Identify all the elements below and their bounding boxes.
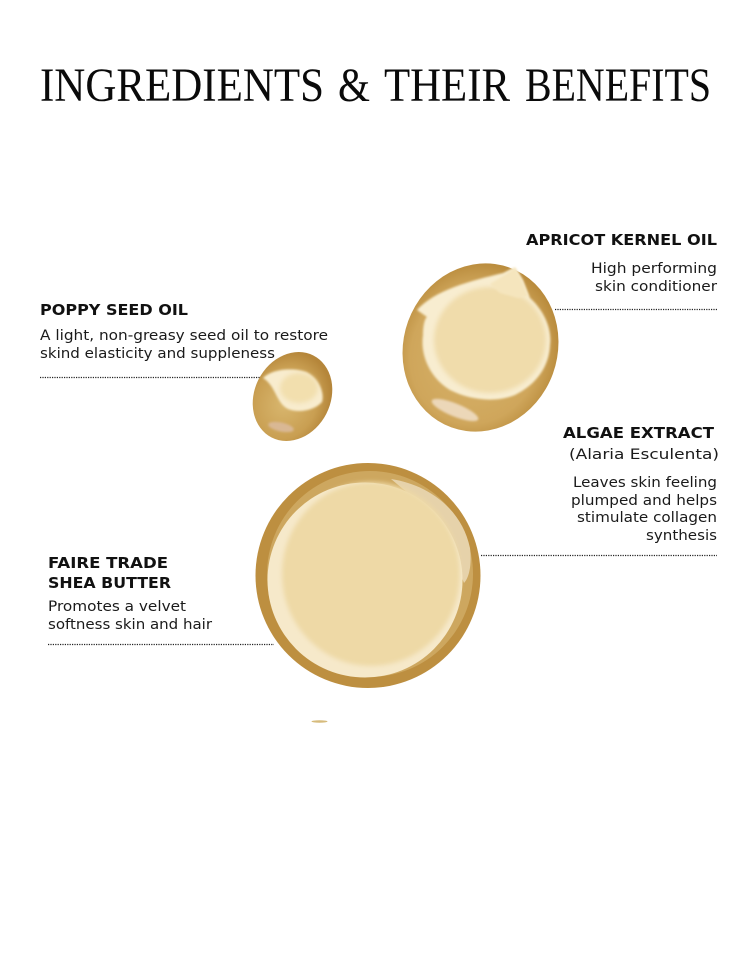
text: shea description [48,599,212,633]
heading: poppy seed oil: POPPY SEED OIL [40,301,188,319]
text: apricot description: skin conditioner [595,279,717,295]
text: algae description: plumped and helps [571,493,717,509]
text: poppy description: skind elasticity and suppleness [40,346,275,362]
decorative gold fleck [312,720,328,723]
title: & [338,59,370,112]
heading: apricot kernel oil: APRICOT KERNEL OIL [526,231,717,249]
text: algae description: Leaves skin feeling [573,475,717,491]
icon: poppy seed oil droplet [238,338,347,455]
text: poppy description: A light, non-greasy seed oil to restore [40,328,328,344]
icon: shea butter droplet [256,463,480,688]
text: shea description: softness skin and hair [48,617,212,633]
text: poppy description [40,328,328,362]
text: shea description: Promotes a velvet [48,599,186,615]
text: apricot description [591,261,717,295]
panel: poppy seed oil callout [40,301,328,378]
title: THEIR [384,59,510,112]
heading: faire trade shea butter [48,554,171,592]
text: apricot description: High performing [591,261,717,277]
title [40,59,711,112]
heading: algae extract: ALGAE EXTRACT [563,424,715,442]
text: latin name: (Alaria Esculenta) [569,447,719,463]
title: INGREDIENTS [40,59,324,112]
text: algae description: stimulate collagen [577,510,717,526]
icon: apricot oil droplet [379,241,582,454]
heading: faire trade shea butter: FAIRE TRADE [48,554,168,572]
panel: apricot kernel oil callout [526,231,717,310]
panel: shea butter callout [48,554,274,644]
text: algae description [571,475,717,544]
heading: faire trade shea butter: SHEA BUTTER [48,574,171,592]
text: algae description: synthesis [646,528,717,544]
title: BENEFITS [525,59,711,112]
panel: algae extract callout [481,424,719,556]
